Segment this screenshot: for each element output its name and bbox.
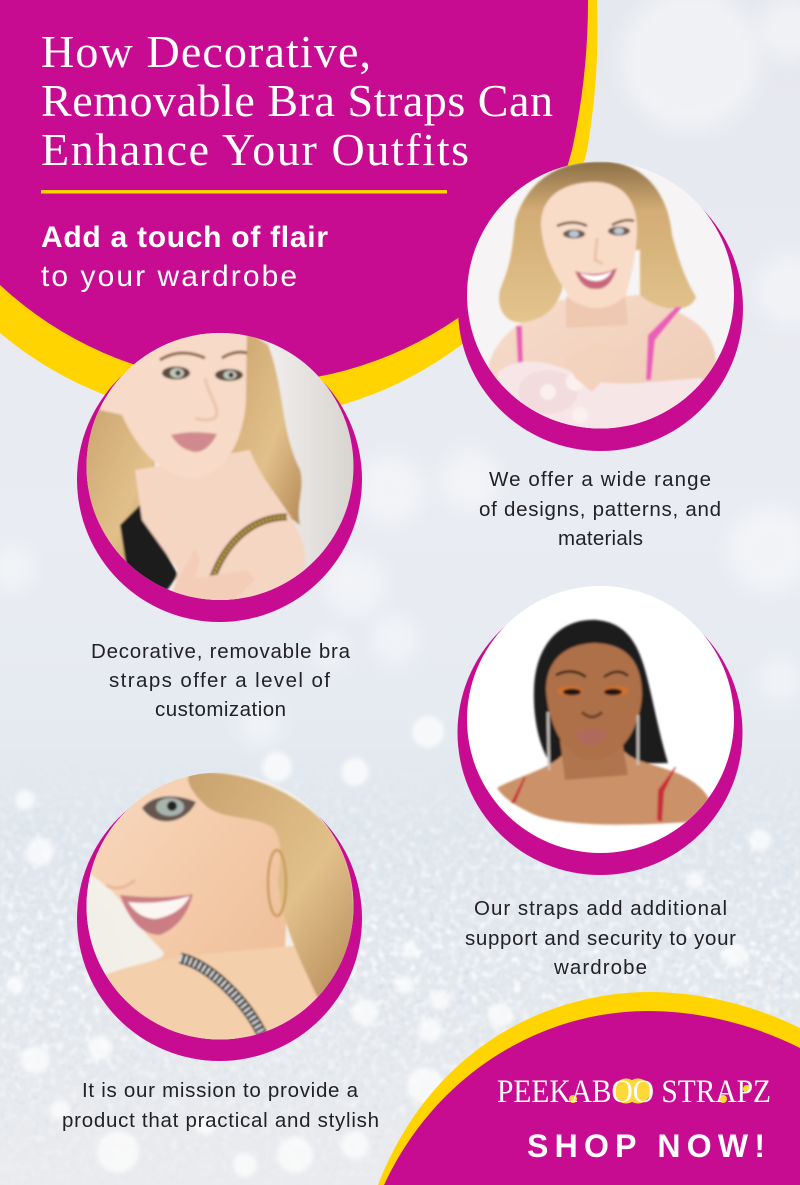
red straps <box>511 767 676 822</box>
title: Enhance Your Outfits <box>41 124 469 175</box>
subheading: Add a touch of flair <box>41 221 328 254</box>
eyes and brows <box>557 220 634 226</box>
hair <box>499 162 696 322</box>
pink straps <box>516 307 682 380</box>
photo card: woman with black hair and red straps <box>458 586 742 875</box>
caption: mission: It is our mission to provide a <box>82 1079 359 1102</box>
hair <box>534 620 668 765</box>
subheading <box>41 221 328 293</box>
black top <box>120 505 178 600</box>
dress <box>497 360 703 428</box>
neck <box>560 740 628 780</box>
hand <box>572 372 601 392</box>
footer yellow swoosh <box>378 992 800 1185</box>
caption: customization: customization <box>155 698 286 721</box>
caption: customization: Decorative, removable bra <box>91 640 351 663</box>
smile <box>575 268 617 289</box>
call to action: SHOP NOW! <box>527 1128 765 1164</box>
footer magenta panel <box>384 1011 800 1185</box>
shoulders and chest <box>497 752 710 825</box>
subheading: to your wardrobe <box>41 260 297 293</box>
caption: designs, patterns, materials: of designs, patterns, and <box>479 498 721 521</box>
face and neck <box>540 180 638 300</box>
shoulders and chest <box>488 294 717 384</box>
header magenta panel <box>0 0 588 383</box>
caption: support and security: wardrobe <box>553 956 647 979</box>
photo card: blonde woman with gold strap <box>77 328 362 622</box>
title divider <box>41 190 447 194</box>
caption: support and security <box>465 897 736 979</box>
face <box>546 643 642 760</box>
photo card: smiling close-up with rhinestone strap <box>77 772 362 1061</box>
title: How Decorative, <box>41 26 371 77</box>
hoop earring <box>268 850 286 916</box>
title <box>41 26 553 175</box>
lips <box>575 728 608 745</box>
caption: support and security: Our straps add additional <box>474 897 727 920</box>
hair <box>188 772 354 998</box>
nose shading <box>106 880 135 888</box>
neck, chest and shoulder <box>135 450 305 605</box>
caption: mission: product that practical and stylish <box>62 1109 379 1132</box>
rhinestone strap <box>180 958 262 1034</box>
hand <box>172 552 254 600</box>
caption: designs, patterns, materials: We offer a wide range <box>489 468 711 491</box>
header yellow swoosh <box>0 0 598 420</box>
caption: support and security: support and security to your <box>465 927 736 950</box>
face <box>100 328 247 478</box>
caption: designs, patterns, materials: materials <box>558 527 643 550</box>
shoulder <box>117 944 318 1040</box>
logo: Peekaboo Strapz: PEEKABOO STRAPZ <box>497 1074 771 1110</box>
title: Removable Bra Straps Can <box>41 75 553 126</box>
skin <box>90 776 288 978</box>
eyes <box>162 366 190 380</box>
eye <box>142 796 196 821</box>
photo card: smiling woman with pink straps <box>458 162 743 451</box>
caption: mission <box>62 1079 379 1132</box>
caption: designs, patterns, materials <box>479 468 721 550</box>
caption: customization: straps offer a level of <box>109 669 330 692</box>
earrings <box>548 712 638 770</box>
gold strap <box>213 517 287 577</box>
smile <box>120 894 193 935</box>
hair <box>86 406 156 562</box>
caption: customization <box>91 640 351 721</box>
eyes <box>556 671 628 677</box>
lips <box>171 432 217 452</box>
